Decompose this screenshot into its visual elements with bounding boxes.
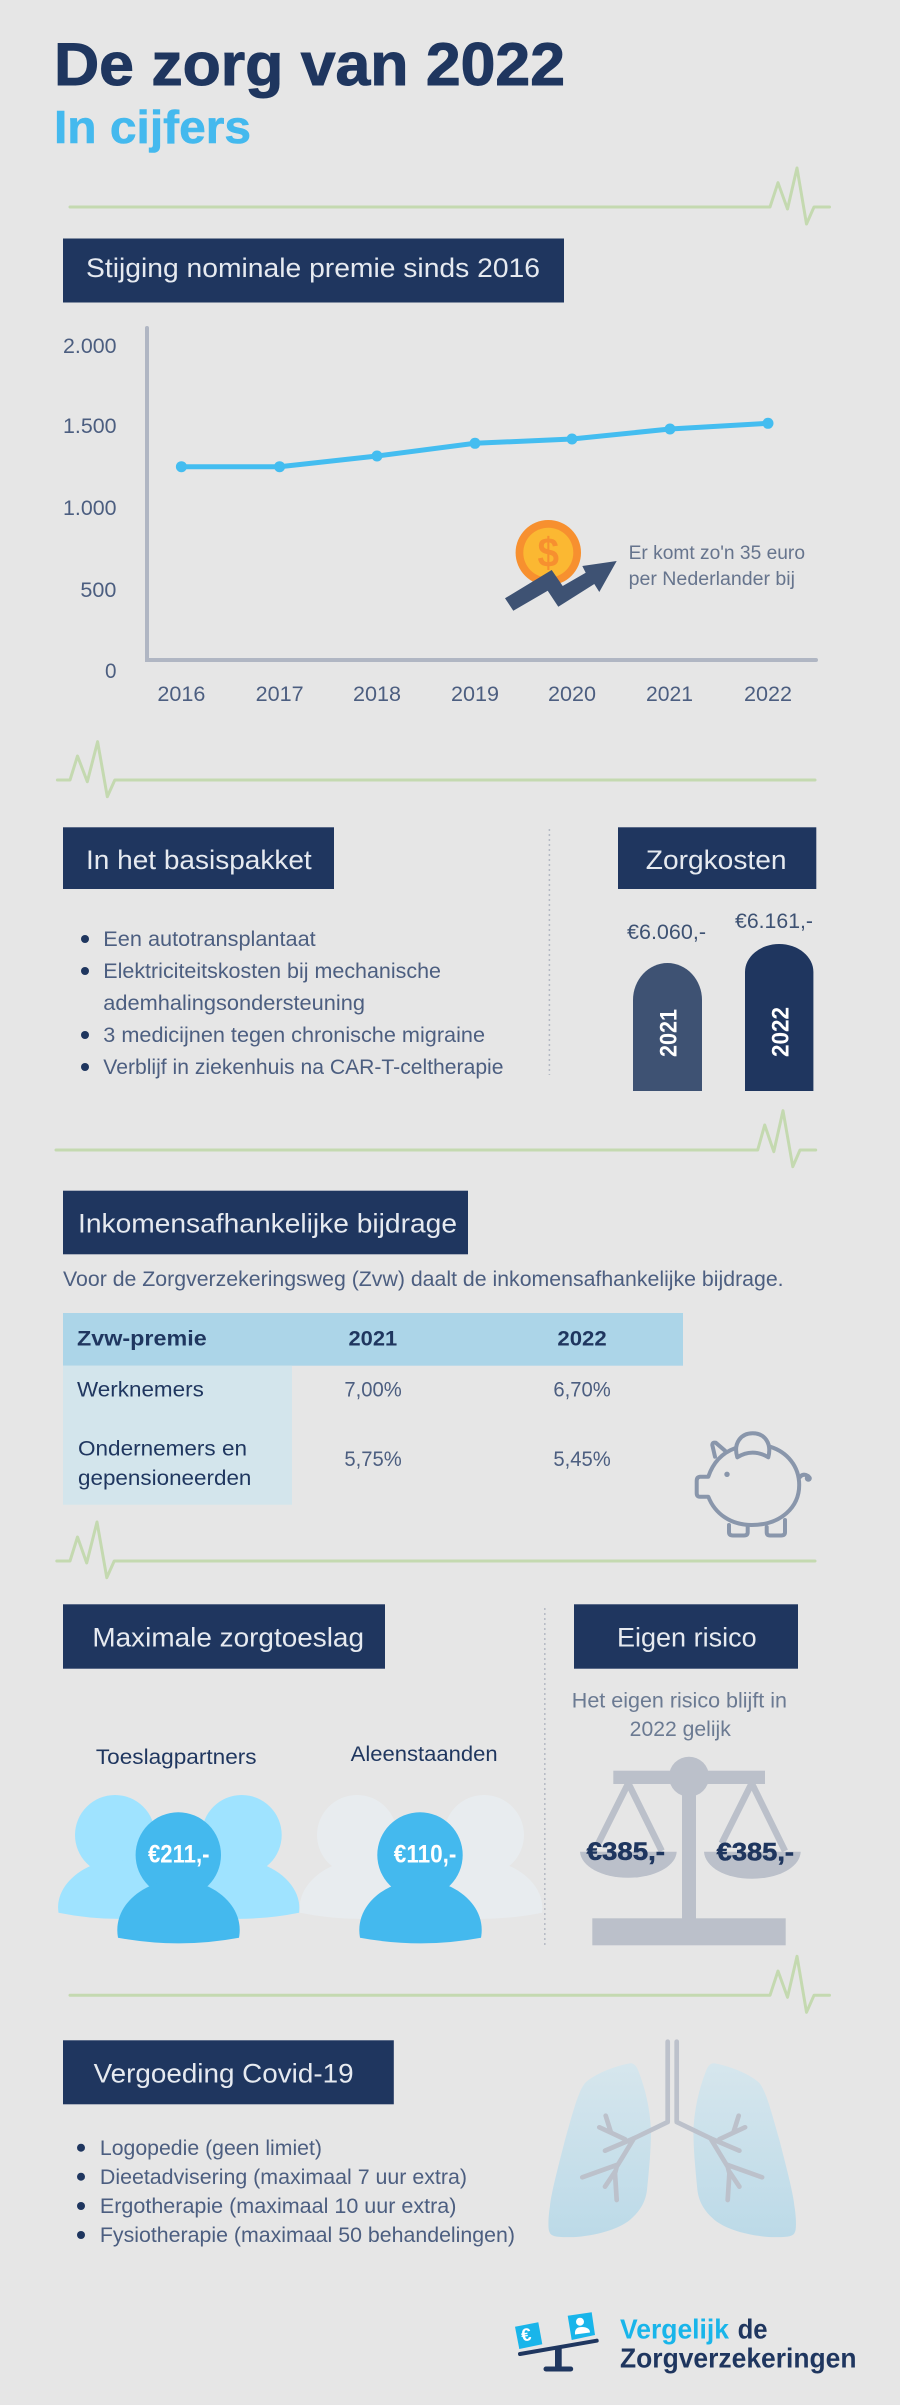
line chart: 1.500 xyxy=(63,415,116,438)
bullet list: basispakket: Een autotransplantaat xyxy=(103,928,316,951)
table: Zvw-premie: 2021 xyxy=(348,1328,398,1351)
table: Zvw-premie xyxy=(63,1313,683,1505)
line chart: 0 xyxy=(105,660,116,683)
heartbeat divider 1 xyxy=(70,168,830,224)
bullet list: covid: Fysiotherapie (maximaal 50 behandelingen) xyxy=(100,2224,515,2247)
heading: zorgkosten: Zorgkosten xyxy=(646,845,786,875)
heading: premium: Stijging nominale premie sinds 2016 xyxy=(86,253,540,283)
heading: covid xyxy=(63,2040,394,2104)
table: Zvw-premie: Zvw-premie xyxy=(77,1328,207,1351)
heartbeat divider 4 xyxy=(57,1522,815,1578)
panel: zorgkosten xyxy=(618,827,816,1091)
line chart: 2021 xyxy=(646,683,693,706)
icon: light group of two persons xyxy=(300,1795,542,1943)
icon: balance scale: €385,- xyxy=(587,1838,665,1866)
logo: Vergelijk de Zorgverzekeringen xyxy=(515,2312,856,2374)
bullet list: covid: Ergotherapie (maximaal 10 uur extra) xyxy=(100,2195,456,2218)
bar 2021: €6.060,- xyxy=(627,921,706,944)
icon: logo balance xyxy=(515,2312,597,2369)
bar 2021 xyxy=(627,921,706,1091)
icon: coin with rising arrow xyxy=(505,520,617,611)
icon: blue group of two persons: €211,- xyxy=(148,1841,210,1869)
bullet list: basispakket: 3 medicijnen tegen chronische migraine xyxy=(103,1024,485,1047)
heading: basispakket xyxy=(63,827,334,889)
heading: zorgtoeslag: Maximale zorgtoeslag xyxy=(92,1623,364,1653)
line chart: 2017 xyxy=(256,683,304,706)
line chart: 2016 xyxy=(157,683,205,706)
bar 2022 xyxy=(735,910,813,1091)
table: Zvw-premie: gepensioneerden xyxy=(78,1467,251,1490)
bullet list: covid xyxy=(77,2137,515,2247)
line chart: 2019 xyxy=(451,683,499,706)
callout: 35 euro: per Nederlander bij xyxy=(629,569,795,590)
icon: lungs xyxy=(548,2042,796,2237)
text: eigen risico gelijk: 2022 gelijk xyxy=(630,1718,731,1741)
text: eigen risico gelijk: Het eigen risico blijft in xyxy=(572,1689,787,1712)
bullet list: covid: Dieetadvisering (maximaal 7 uur extra) xyxy=(100,2166,467,2189)
heartbeat divider 3 xyxy=(56,1111,816,1167)
panel: vergoeding covid-19 xyxy=(63,2040,796,2247)
bullet list: covid: Logopedie (geen limiet) xyxy=(100,2137,322,2160)
icon: piggy bank xyxy=(697,1433,812,1536)
heading: covid: Vergoeding Covid-19 xyxy=(94,2058,354,2088)
logo: Vergelijk de Zorgverzekeringen: Vergelijk xyxy=(620,2313,729,2344)
title: De zorg van 2022 xyxy=(54,31,565,98)
icon: light group of two persons: €110,- xyxy=(394,1841,456,1869)
panel: basispakket xyxy=(63,827,504,1079)
logo: Vergelijk de Zorgverzekeringen: de xyxy=(738,2313,768,2344)
heading: premium xyxy=(63,238,564,302)
subtitle: In cijfers xyxy=(54,101,251,153)
heading: zorgkosten xyxy=(618,827,816,889)
heading: basispakket: In het basispakket xyxy=(86,845,312,875)
icon: coin with rising arrow: $ xyxy=(538,529,559,576)
table: Zvw-premie: 5,75% xyxy=(344,1448,402,1471)
line chart: 500 xyxy=(80,579,116,602)
table: Zvw-premie: 5,45% xyxy=(553,1448,611,1471)
bullet list: basispakket: ademhalingsondersteuning xyxy=(103,992,365,1015)
bullet list: basispakket: Elektriciteitskosten bij mechanische xyxy=(103,960,441,983)
callout: 35 euro: Er komt zo'n 35 euro xyxy=(629,543,805,564)
intro text: Voor de Zorgverzekeringsweg (Zvw) daalt de inkomensafhankelijke bijdrage. xyxy=(63,1268,784,1291)
icon: blue group of two persons xyxy=(58,1795,299,1943)
table: Zvw-premie: 2022 xyxy=(557,1328,607,1351)
heading: bijdrage xyxy=(63,1191,468,1254)
title xyxy=(54,31,565,153)
panel: inkomensafhankelijke bijdrage xyxy=(63,1191,812,1536)
bullet list: basispakket xyxy=(81,928,504,1079)
bullet list: basispakket: Verblijf in ziekenhuis na CAR-T-celtherapie xyxy=(103,1056,504,1079)
label: Toeslagpartners: Toeslagpartners xyxy=(96,1746,257,1769)
panel: maximale zorgtoeslag xyxy=(58,1604,542,1943)
bar 2021: 2021 xyxy=(656,1009,682,1057)
icon: balance scale xyxy=(580,1757,801,1945)
line chart xyxy=(63,328,816,706)
panel: premium line chart xyxy=(63,238,816,706)
table: Zvw-premie: Werknemers xyxy=(77,1379,204,1402)
line chart: 2020 xyxy=(548,683,596,706)
bar 2022: 2022 xyxy=(768,1007,794,1057)
panel: eigen risico xyxy=(572,1604,801,1945)
icon: logo balance: € xyxy=(520,2324,532,2345)
text: eigen risico gelijk xyxy=(572,1689,787,1741)
heartbeat divider 5 xyxy=(70,1956,830,2012)
heading: eigen risico: Eigen risico xyxy=(617,1623,757,1653)
table: Zvw-premie: Ondernemers en xyxy=(78,1438,247,1461)
table: Zvw-premie: 7,00% xyxy=(344,1379,402,1402)
line chart: 2022 xyxy=(744,683,792,706)
line chart: 1.000 xyxy=(63,497,116,520)
heading: eigen risico xyxy=(574,1604,798,1669)
heartbeat divider 2 xyxy=(57,742,815,797)
line chart: 2018 xyxy=(353,683,401,706)
heading: zorgtoeslag xyxy=(63,1604,385,1669)
icon: balance scale: €385,- xyxy=(717,1838,794,1866)
bar 2022: €6.161,- xyxy=(735,910,813,933)
callout: 35 euro xyxy=(629,543,805,590)
line chart: 2.000 xyxy=(63,335,116,358)
heading: bijdrage: Inkomensafhankelijke bijdrage xyxy=(78,1209,457,1239)
label: Aleenstaanden: Aleenstaanden xyxy=(351,1743,498,1766)
logo: Vergelijk de Zorgverzekeringen: Zorgverzekeringen xyxy=(620,2343,856,2374)
table: Zvw-premie: 6,70% xyxy=(553,1379,611,1402)
